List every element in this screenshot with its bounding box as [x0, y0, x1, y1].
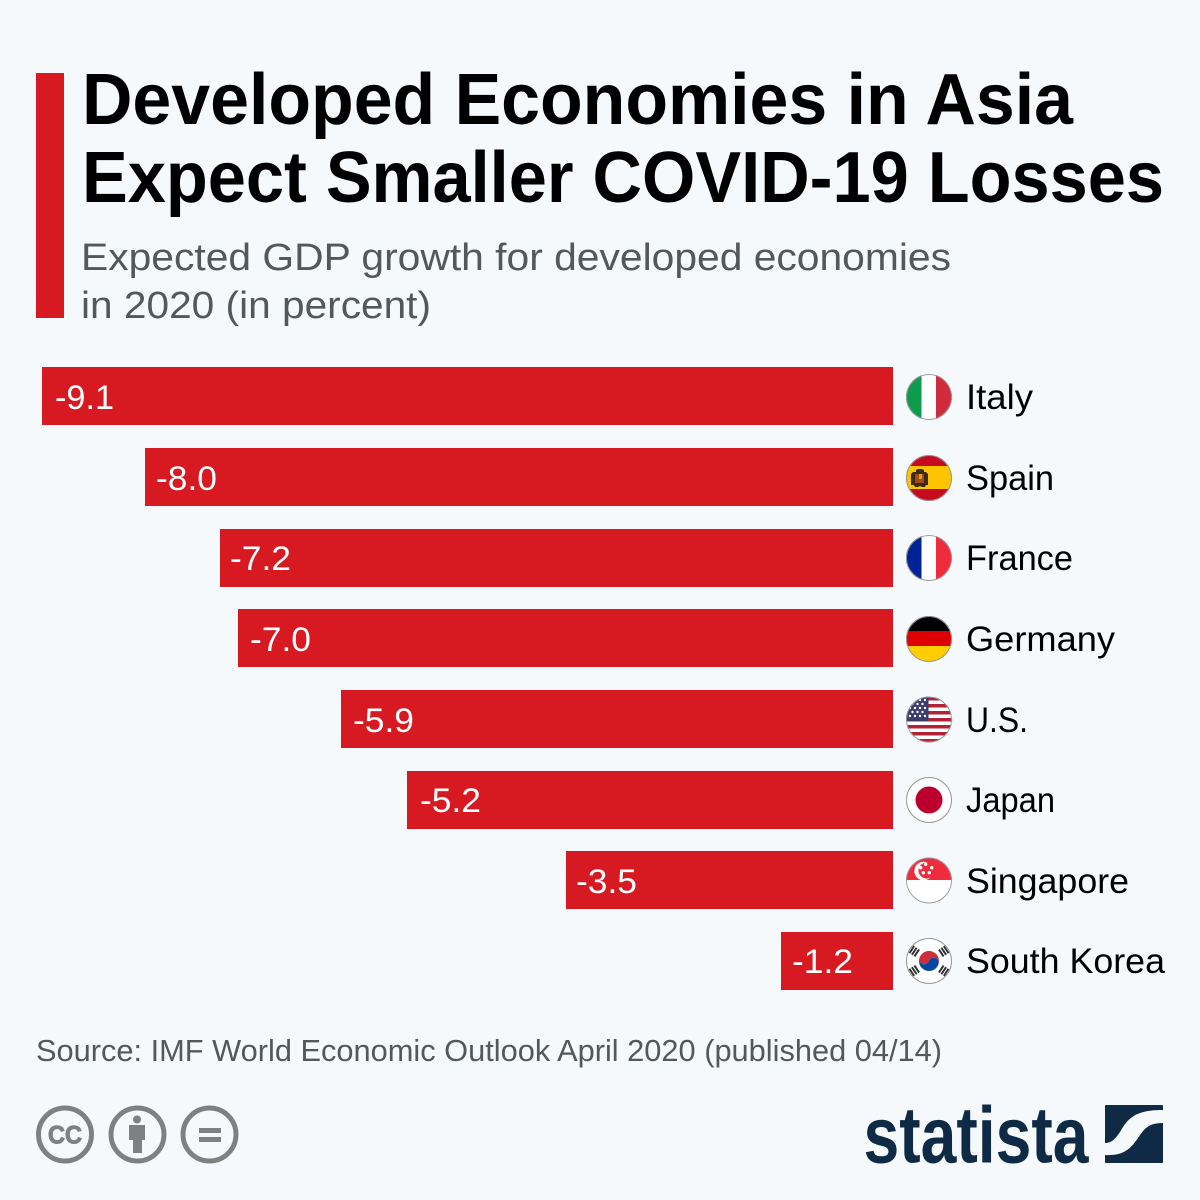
country labels: Germany [966, 620, 1116, 659]
country labels: Spain [966, 459, 1054, 498]
country labels: U.S. [966, 701, 1028, 740]
country labels: South Korea [966, 942, 1166, 981]
bar: Germany [238, 609, 893, 667]
icon: attribution [111, 1108, 164, 1161]
icon: US flag [906, 696, 952, 743]
title accent bar [36, 73, 64, 318]
bar: Spain [145, 448, 893, 506]
icon: France flag [906, 535, 952, 581]
icon: creative commons: CC [48, 1122, 82, 1150]
country labels [966, 378, 1166, 981]
bar: South Korea: -1.2 [792, 943, 853, 981]
bar: Italy [42, 367, 893, 425]
country labels: Singapore [966, 862, 1129, 901]
title: Developed Economies in Asia [82, 60, 1074, 140]
subtitle: Expected GDP growth for developed economies [81, 237, 951, 279]
statista logo: statista [864, 1090, 1089, 1180]
source: Source: IMF World Economic Outlook April 2020 (published 04/14) [36, 1033, 942, 1068]
bar: Japan: -5.2 [420, 782, 481, 820]
icon: Germany flag [906, 616, 952, 662]
bar: France [220, 529, 893, 587]
bar: Spain: -8.0 [156, 460, 217, 498]
icon: Spain flag [906, 455, 952, 501]
bar: South Korea [781, 932, 893, 990]
title: Expect Smaller COVID-19 Losses [82, 138, 1164, 218]
icon: statista mark [1105, 1105, 1163, 1163]
icon: Singapore flag [906, 857, 952, 904]
bar: France: -7.2 [230, 540, 291, 578]
country labels: Italy [966, 378, 1034, 417]
bar: Italy: -9.1 [55, 379, 114, 417]
subtitle: in 2020 (in percent) [81, 285, 431, 327]
icon: creative commons [38, 1108, 92, 1161]
subtitle [81, 237, 951, 327]
country labels: Japan [966, 781, 1055, 820]
bar: Singapore [566, 851, 893, 909]
bar: Japan [407, 771, 893, 829]
bar: U.S.: -5.9 [353, 702, 414, 740]
country labels: France [966, 539, 1073, 578]
icon: Italy flag [906, 374, 952, 420]
bar: U.S. [341, 690, 893, 748]
icon: Japan flag [906, 778, 952, 822]
bar: Singapore: -3.5 [576, 863, 637, 901]
title [82, 60, 1164, 218]
bar: Germany: -7.0 [250, 621, 311, 659]
icon: no derivatives [183, 1108, 236, 1161]
icon: South Korea flag [906, 938, 952, 984]
